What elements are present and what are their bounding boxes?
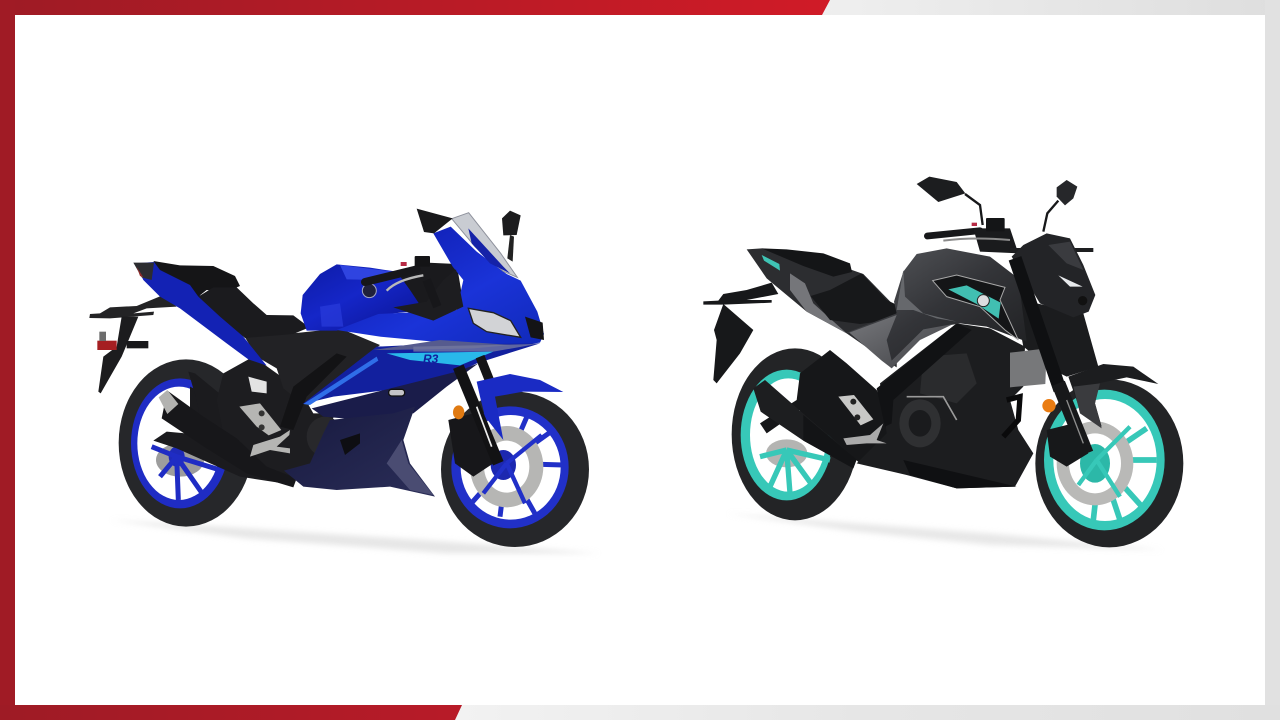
- swingarm and engine: [760, 323, 1033, 488]
- rider seat: [198, 287, 309, 338]
- lower cowl: [284, 407, 435, 497]
- headlight cowl: [1012, 233, 1095, 317]
- frame: grey right bar: [1265, 0, 1280, 720]
- tail blue side panel: [135, 262, 267, 366]
- cyan decal with model name: [387, 352, 493, 366]
- dark headstock area behind fork: [1010, 277, 1098, 377]
- frame: grey bottom right bar: [451, 705, 1280, 720]
- tail teal accent: [762, 255, 780, 271]
- fuel tank: [847, 248, 1027, 367]
- dark area behind handlebars: [390, 263, 464, 312]
- tank teal decal: [948, 285, 1001, 319]
- heel plate and footpeg: [838, 395, 887, 445]
- tank scoop: [933, 275, 1018, 340]
- side fairing blue panel: [303, 343, 540, 404]
- headlight strip: [1058, 275, 1083, 287]
- rear fender hanger: [703, 283, 778, 383]
- tank emblem: [977, 295, 989, 307]
- pillion seat: [153, 261, 240, 297]
- main frame: [877, 323, 972, 427]
- front fender: [1068, 364, 1158, 428]
- exhaust muffler: [159, 390, 297, 487]
- rider seat: [811, 273, 901, 324]
- black cockpit panel: [393, 269, 463, 321]
- fuel tank: [301, 264, 423, 331]
- brake caliper: [1047, 423, 1088, 467]
- front brake disc: [1057, 421, 1133, 505]
- front fender: [477, 374, 563, 440]
- left mirror: [417, 209, 453, 233]
- motorcycle: blue sport bike: [89, 209, 600, 553]
- tank lower wedge: [849, 315, 953, 368]
- fork legs: [458, 357, 498, 463]
- ground shadow: [727, 513, 1163, 550]
- motorcycle: grey and teal naked bike: [703, 177, 1183, 550]
- upper fairing: [337, 227, 544, 346]
- fork legs: [1015, 258, 1087, 453]
- right mirror: [502, 211, 521, 262]
- left mirror: [917, 177, 983, 225]
- rear hugger and plate hanger: [89, 295, 177, 393]
- exhaust muffler: [753, 380, 857, 468]
- grey side panel: [790, 273, 847, 333]
- rear wheel: [732, 348, 858, 520]
- fairing badge: [389, 389, 405, 396]
- windscreen: [452, 213, 517, 277]
- cyan decal with model name: R3: [423, 352, 439, 366]
- tail body: [747, 248, 898, 367]
- swingarm and engine block: [153, 357, 362, 483]
- brake caliper: [448, 413, 493, 477]
- orange indicator: [453, 405, 464, 419]
- navy mid fairing: [312, 363, 478, 422]
- tail reflector: [97, 341, 117, 350]
- handlebar and lever: [927, 218, 1093, 253]
- pillion seat: [762, 248, 852, 277]
- rear wheel: [119, 359, 253, 527]
- orange indicator: [1042, 399, 1056, 412]
- front brake disc: [470, 426, 543, 507]
- right mirror: [1043, 180, 1077, 232]
- ground shadow: [110, 520, 600, 553]
- frame: grey top right bar: [819, 0, 1280, 15]
- handlebar and lever: [365, 256, 437, 307]
- front wheel: [441, 392, 589, 547]
- frame: red left bar: [0, 0, 15, 720]
- heel plate and footpeg: [239, 403, 290, 457]
- headlight: [468, 308, 521, 337]
- front wheel: [1035, 379, 1183, 547]
- frame: red top bar: [0, 0, 830, 15]
- frame: red bottom bar: [0, 705, 462, 720]
- main black frame: [245, 328, 380, 407]
- tank emblem: [362, 284, 376, 298]
- radiator: [1010, 348, 1047, 387]
- air vent: [525, 317, 544, 340]
